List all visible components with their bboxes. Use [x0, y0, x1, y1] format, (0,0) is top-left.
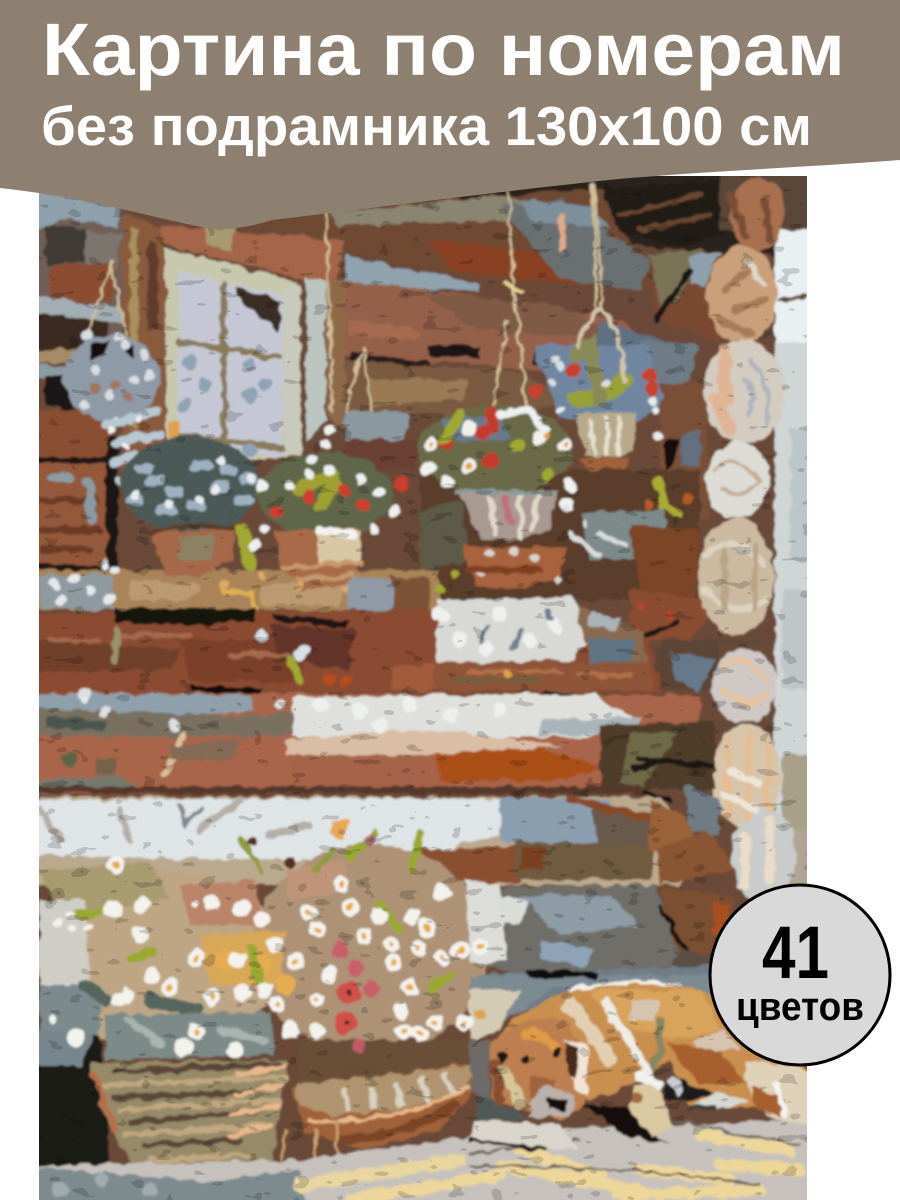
painting: log cabin porch with flowers and dog	[20, 160, 830, 1200]
hanging plants and baskets	[64, 183, 687, 700]
middle logs	[20, 570, 735, 1010]
badge: colour count: 41	[762, 911, 829, 994]
badge: colour count	[710, 885, 890, 1065]
badge: colour count: цветов	[736, 985, 864, 1029]
window	[122, 213, 345, 475]
lower flower background	[35, 835, 505, 1090]
title: Картина по номерам	[42, 8, 845, 91]
upper left wall	[39, 193, 126, 572]
banner	[0, 0, 900, 229]
dog and floor	[20, 973, 830, 1200]
log end column	[696, 176, 807, 900]
ground flowers	[54, 842, 481, 1050]
baskets	[39, 1028, 474, 1168]
subtitle: без подрамника 130х100 см	[41, 95, 812, 157]
painterly texture overlay	[39, 176, 807, 1200]
upper logs	[330, 176, 775, 694]
